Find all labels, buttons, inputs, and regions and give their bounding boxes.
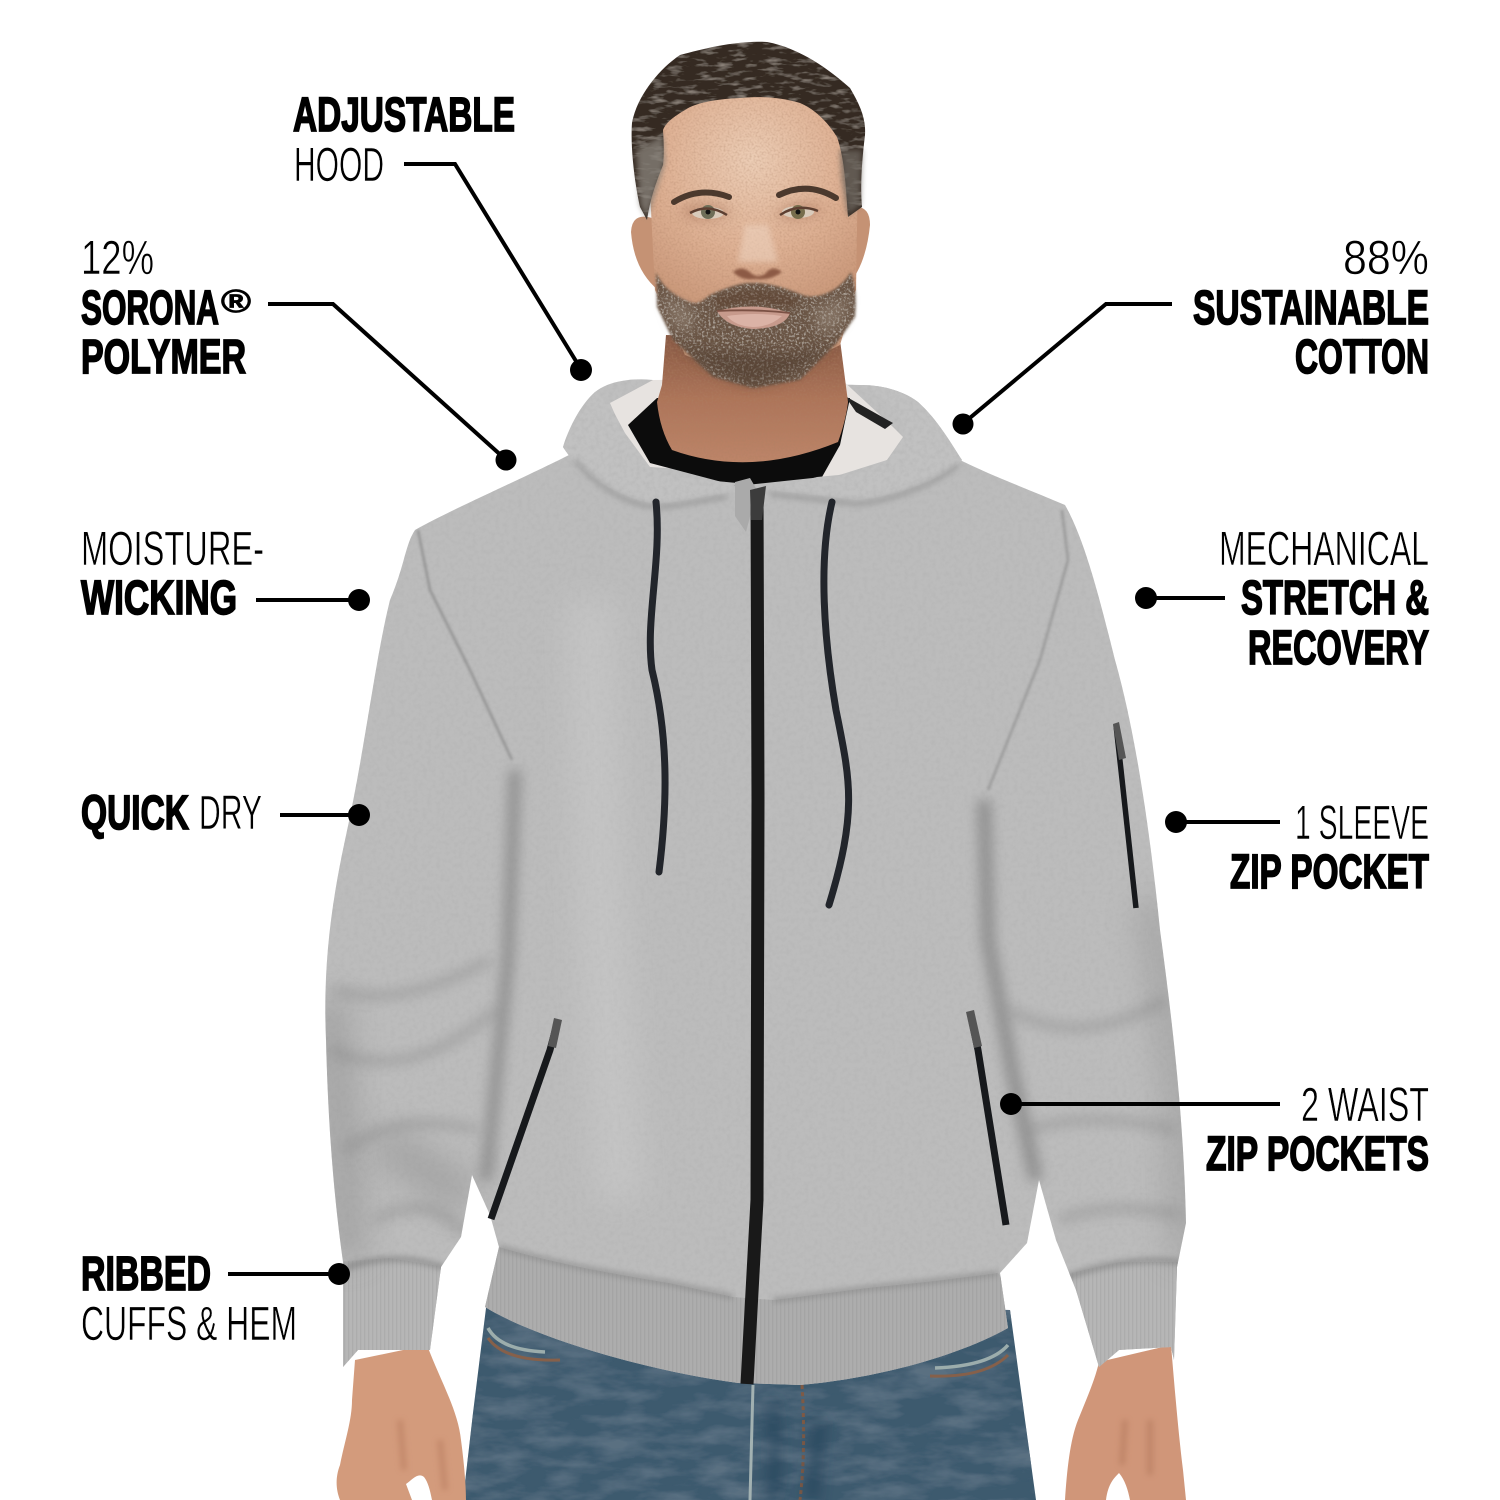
leader line xyxy=(404,164,579,366)
heading: HOOD xyxy=(294,139,384,192)
callout: 2 waist zip pockets xyxy=(1000,1079,1429,1181)
black tee xyxy=(628,398,850,486)
heading xyxy=(81,1248,297,1351)
heading xyxy=(1230,797,1429,899)
heading xyxy=(1193,232,1429,384)
man wearing hoodie photo xyxy=(325,42,1186,1500)
hair sides grey xyxy=(636,135,665,218)
callout: adjustable hood xyxy=(293,89,592,381)
callout: 1 sleeve zip pocket xyxy=(1165,797,1429,899)
callout: 88% sustainable cotton xyxy=(952,232,1429,434)
mouth xyxy=(717,306,790,329)
hood under shadow xyxy=(575,460,958,507)
heading: SORONA xyxy=(81,282,219,335)
heading: ADJUSTABLE xyxy=(293,89,515,142)
callout: ribbed cuffs and hem xyxy=(81,1248,350,1351)
eyes shadow xyxy=(682,203,826,220)
left drawstring xyxy=(650,502,665,872)
callout: 12% sorona polymer xyxy=(81,232,516,470)
dot xyxy=(496,450,516,470)
zipper tab flap xyxy=(735,478,757,532)
left cuff rib xyxy=(343,1266,442,1367)
hoodie body and sleeves xyxy=(325,452,1186,1400)
dot xyxy=(1000,1093,1022,1115)
heading: RIBBED xyxy=(81,1248,211,1301)
chin shadow tone xyxy=(680,345,830,385)
heading xyxy=(81,232,252,384)
ears xyxy=(631,217,658,290)
right drawstring xyxy=(824,502,849,905)
hood, lining, tee and neck xyxy=(563,335,962,532)
dot xyxy=(348,804,370,826)
main zipper xyxy=(747,486,766,1384)
heading xyxy=(1206,1079,1429,1181)
heading: ® xyxy=(221,283,252,319)
hood front right xyxy=(770,385,962,500)
heading xyxy=(293,89,515,192)
beard cheek greys xyxy=(662,295,850,335)
hair xyxy=(632,42,865,220)
hood front left xyxy=(563,392,737,503)
heading: 88% xyxy=(1343,232,1429,285)
leader line xyxy=(256,598,359,602)
heading: 12% xyxy=(81,232,154,285)
hoodie shading xyxy=(330,510,1185,1400)
heading: POLYMER xyxy=(81,331,246,384)
eyebrows xyxy=(674,189,836,202)
heading xyxy=(1219,523,1429,675)
dot xyxy=(570,359,592,381)
leader line xyxy=(228,1272,339,1276)
jeans xyxy=(463,1300,1036,1500)
left waist zipper xyxy=(491,1018,562,1219)
hood base xyxy=(563,379,962,503)
dot xyxy=(952,414,974,434)
heading: 2 WAIST xyxy=(1301,1079,1429,1132)
right waist zipper xyxy=(966,1010,1006,1225)
nose xyxy=(733,225,782,279)
neck xyxy=(657,335,848,462)
head xyxy=(631,42,870,388)
hood lining xyxy=(610,378,903,478)
heading: DRY xyxy=(199,787,262,840)
right cuff rib xyxy=(1070,1262,1178,1367)
sleeve zipper pocket xyxy=(1113,722,1136,908)
heading: MOISTURE- xyxy=(81,523,264,576)
eyes xyxy=(690,205,818,219)
beard xyxy=(656,272,856,388)
dot xyxy=(1135,587,1157,609)
moustache dark xyxy=(712,290,800,308)
leader line xyxy=(1176,820,1280,824)
heading: WICKING xyxy=(81,572,237,625)
callout: moisture-wicking xyxy=(81,523,370,625)
leader line xyxy=(965,304,1172,422)
hem rib band xyxy=(485,1247,1008,1385)
leader line xyxy=(1011,1102,1280,1106)
callout: mechanical stretch and recovery xyxy=(1135,523,1429,675)
dot xyxy=(348,589,370,611)
heading: CUFFS & HEM xyxy=(81,1298,297,1351)
heading: QUICK xyxy=(81,787,189,840)
left hand xyxy=(337,1345,466,1500)
heading xyxy=(81,523,264,625)
right hand xyxy=(1065,1345,1186,1500)
heading: COTTON xyxy=(1295,331,1429,384)
leader line xyxy=(280,813,359,817)
face xyxy=(648,88,858,385)
leader line xyxy=(268,304,504,458)
callout: quick dry xyxy=(81,787,370,840)
dot xyxy=(1165,811,1187,833)
leader line xyxy=(1146,596,1225,600)
dot xyxy=(328,1263,350,1285)
